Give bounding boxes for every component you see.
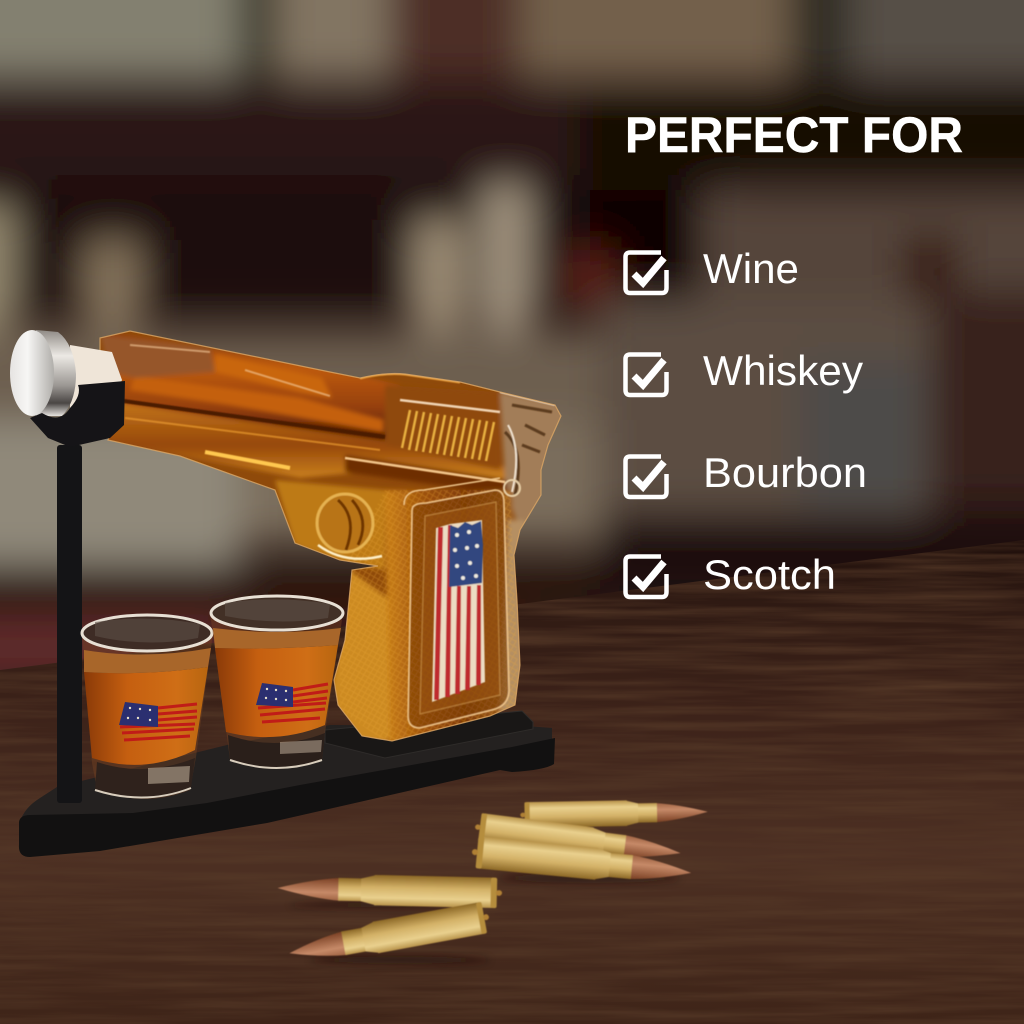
decanter plate bbox=[325, 711, 533, 758]
shot glass 2 bbox=[210, 596, 343, 769]
bullet top right bbox=[520, 799, 708, 828]
list item: Wine bbox=[626, 245, 799, 293]
bullet left bbox=[277, 873, 502, 908]
glass outline bbox=[100, 331, 561, 741]
bullet shadows bbox=[290, 873, 680, 964]
icon: checkbox bbox=[626, 456, 666, 497]
slide serrations bbox=[402, 410, 494, 461]
grip texture bbox=[340, 490, 520, 745]
bullet lower bbox=[470, 836, 693, 889]
bullet middle bbox=[473, 812, 682, 867]
barrel top glint bbox=[130, 345, 330, 396]
icon: checkbox bbox=[626, 556, 666, 597]
title: PERFECT FOR bbox=[625, 107, 963, 163]
pistol bottle cork and cap bbox=[10, 330, 122, 416]
flag on grip bbox=[432, 520, 485, 702]
trigger guard ring bbox=[317, 494, 373, 552]
list item: Bourbon bbox=[626, 449, 867, 497]
small flag bbox=[256, 683, 328, 722]
stand: base bbox=[19, 711, 555, 857]
decanter: pistol bbox=[90, 320, 570, 750]
stand holder bbox=[30, 381, 125, 447]
stand: support pole bbox=[57, 445, 82, 803]
label: Bourbon bbox=[703, 449, 867, 496]
icon: checkbox bbox=[626, 252, 666, 293]
list item: Scotch bbox=[626, 551, 836, 598]
shot glass 1 bbox=[82, 615, 213, 799]
bullets bbox=[277, 799, 708, 969]
grip panel bbox=[408, 490, 509, 728]
bullet bottom bbox=[287, 901, 492, 969]
list item: Whiskey bbox=[626, 347, 863, 395]
glass interior bbox=[100, 330, 565, 745]
rear sight details bbox=[505, 405, 552, 495]
base top surface bbox=[20, 725, 552, 822]
flag stars bbox=[453, 530, 479, 580]
base front face bbox=[19, 738, 555, 857]
rod highlights bbox=[345, 458, 505, 482]
icon: checkbox bbox=[626, 354, 666, 395]
label: Whiskey bbox=[703, 347, 863, 394]
wooden table bbox=[0, 540, 1024, 1024]
label: Scotch bbox=[703, 551, 836, 598]
label: Wine bbox=[703, 245, 799, 292]
slide dark seam bbox=[124, 401, 385, 437]
small flag bbox=[119, 702, 197, 740]
